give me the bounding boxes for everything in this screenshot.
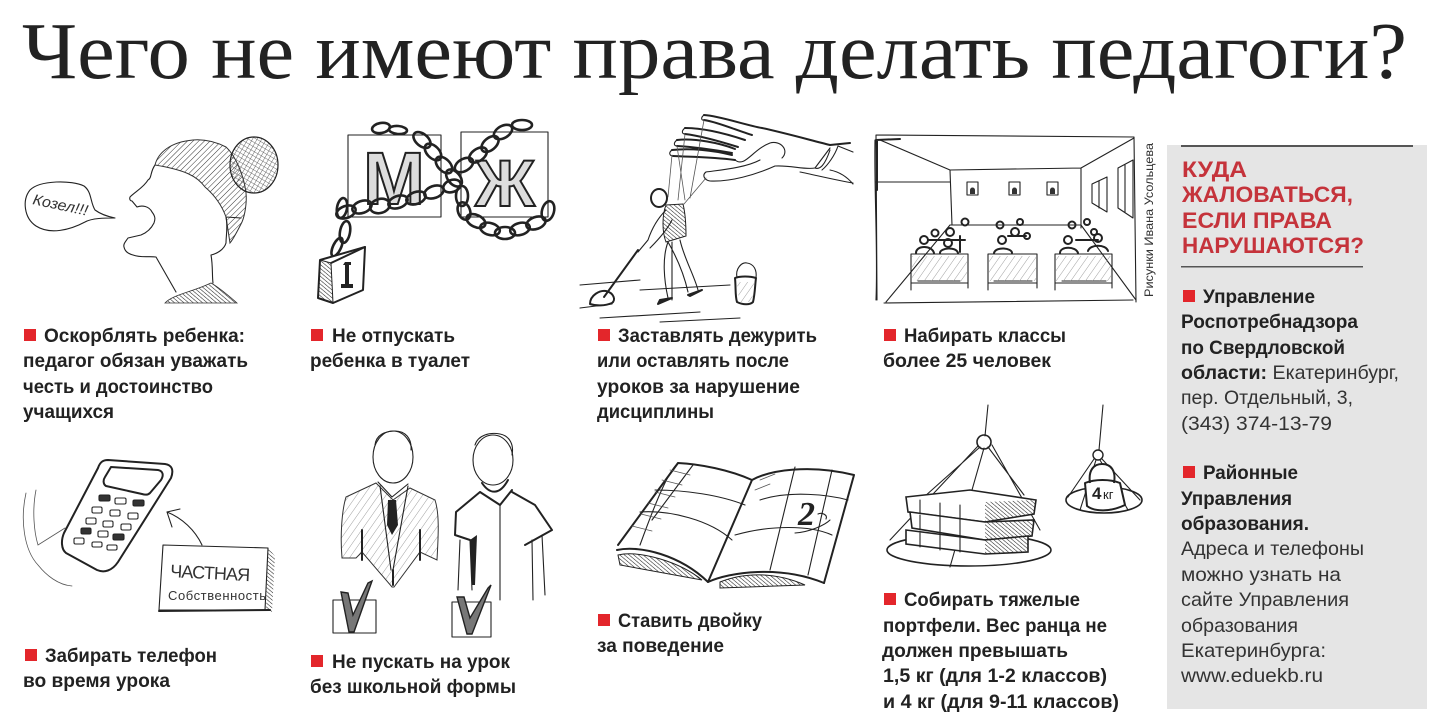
caption: должен превышать	[882, 640, 1068, 662]
caption: дисциплины	[597, 401, 714, 423]
caption	[310, 325, 470, 372]
drawing credit: Рисунки Ивана Усольцева	[1142, 143, 1156, 297]
caption: учащихся	[23, 401, 114, 423]
caption: или оставлять после	[597, 350, 789, 372]
caption: педагог обязан уважать	[23, 350, 248, 372]
panel: toilet	[310, 120, 556, 372]
caption: Забирать телефон	[45, 645, 217, 667]
caption: более 25 человек	[883, 350, 1051, 372]
caption: Заставлять дежурить	[618, 325, 817, 347]
icon: open grade book	[617, 463, 854, 588]
panel: insult a child	[23, 137, 278, 423]
panel: taking phones	[23, 460, 275, 692]
panel: heavy bags	[882, 405, 1142, 713]
contact: Rospotrebnadzor: (343) 374-13-79	[1181, 413, 1332, 435]
caption: Набирать классы	[904, 325, 1066, 347]
caption: Ставить двойку	[618, 610, 762, 632]
heading: ЖАЛОВАТЬСЯ,	[1181, 182, 1353, 207]
desks	[911, 254, 1112, 290]
caption	[23, 645, 217, 692]
caption: без школьной формы	[310, 676, 516, 698]
caption: уроков за нарушение	[597, 376, 800, 398]
heading: ЕСЛИ ПРАВА	[1182, 208, 1332, 233]
contact: Rospotrebnadzor: пер. Отдельный, 3,	[1181, 387, 1353, 409]
contact: district education offices: образования.	[1181, 513, 1309, 535]
caption	[597, 610, 762, 657]
icon: two pupils in uniform with check marks	[333, 431, 552, 637]
caption	[882, 589, 1119, 713]
icon: shouting head in a knit hat	[25, 137, 278, 303]
contact: district education offices: Управления	[1181, 488, 1292, 510]
icon: scales with books and 4 kg weight	[887, 405, 1142, 567]
contact: district education offices: www.eduekb.ru	[1180, 665, 1323, 687]
caption: портфели. Вес ранца не	[883, 615, 1107, 637]
icon: phone and private property sign: Собственность	[168, 588, 266, 603]
caption: честь и достоинство	[23, 376, 213, 398]
panel: forced cleaning	[580, 115, 853, 423]
caption	[310, 651, 516, 698]
icon: crowded classroom	[875, 135, 1136, 303]
caption	[883, 325, 1066, 372]
contact: Rospotrebnadzor	[1181, 286, 1399, 435]
heading: НАРУШАЮТСЯ?	[1182, 233, 1364, 258]
panel: crowded classes	[875, 135, 1156, 372]
contact: district education offices: образования	[1181, 615, 1298, 637]
caption: Не отпускать	[332, 325, 455, 347]
check boxes	[333, 581, 491, 637]
caption: и 4 кг (для 9-11 классов)	[883, 691, 1119, 713]
contact: district education offices: можно узнать на	[1181, 564, 1341, 586]
icon: open grade book: 2	[797, 496, 815, 533]
contact: district education offices: Екатеринбурга:	[1181, 640, 1326, 662]
caption: Не пускать на урок	[332, 651, 510, 673]
caption: во время урока	[23, 670, 170, 692]
heading: КУДА	[1182, 157, 1247, 182]
contact: district education offices	[1180, 462, 1364, 687]
panel: where to complain	[1167, 145, 1427, 709]
icon: phone and private property sign: ЧАСТНАЯ	[170, 561, 251, 585]
icon: scales with books and 4 kg weight: кг	[1103, 487, 1114, 502]
icon: chained toilet signs with padlock: М	[363, 137, 425, 220]
caption: ребенка в туалет	[310, 350, 470, 372]
icon: scales with books and 4 kg weight: 4	[1092, 484, 1102, 503]
contact: district education offices: сайте Управления	[1181, 589, 1349, 611]
contact: Rospotrebnadzor: Роспотребнадзора	[1181, 311, 1358, 333]
heading	[1181, 157, 1364, 258]
panel: school uniform	[310, 431, 552, 698]
contact: Rospotrebnadzor: области: Екатеринбург,	[1181, 362, 1399, 384]
icon: chained toilet signs with padlock	[318, 120, 556, 303]
title: Чего не имеют права делать педагоги?	[22, 8, 1407, 96]
caption: 1,5 кг (для 1-2 классов)	[883, 665, 1107, 687]
icon: puppeteer hand and boy with mop	[580, 115, 853, 322]
pupils	[916, 218, 1108, 253]
caption	[597, 325, 817, 423]
icon: chained toilet signs with padlock: Ж	[474, 146, 535, 220]
contact: district education offices: Адреса и телефоны	[1181, 538, 1364, 560]
padlock	[318, 247, 365, 303]
speech bubble: Козел!!!	[31, 191, 90, 220]
caption: за поведение	[597, 635, 724, 657]
icon: phone and private property sign	[23, 460, 275, 612]
caption: Оскорблять ребенка:	[44, 325, 245, 347]
speech bubble	[25, 182, 115, 231]
caption: Собирать тяжелые	[904, 589, 1080, 611]
contact: Rospotrebnadzor: по Свердловской	[1181, 337, 1345, 359]
caption	[23, 325, 248, 423]
panel: grades for behaviour	[597, 463, 854, 657]
contact: district education offices: Районные	[1203, 462, 1298, 484]
contact: Rospotrebnadzor: Управление	[1203, 286, 1315, 308]
